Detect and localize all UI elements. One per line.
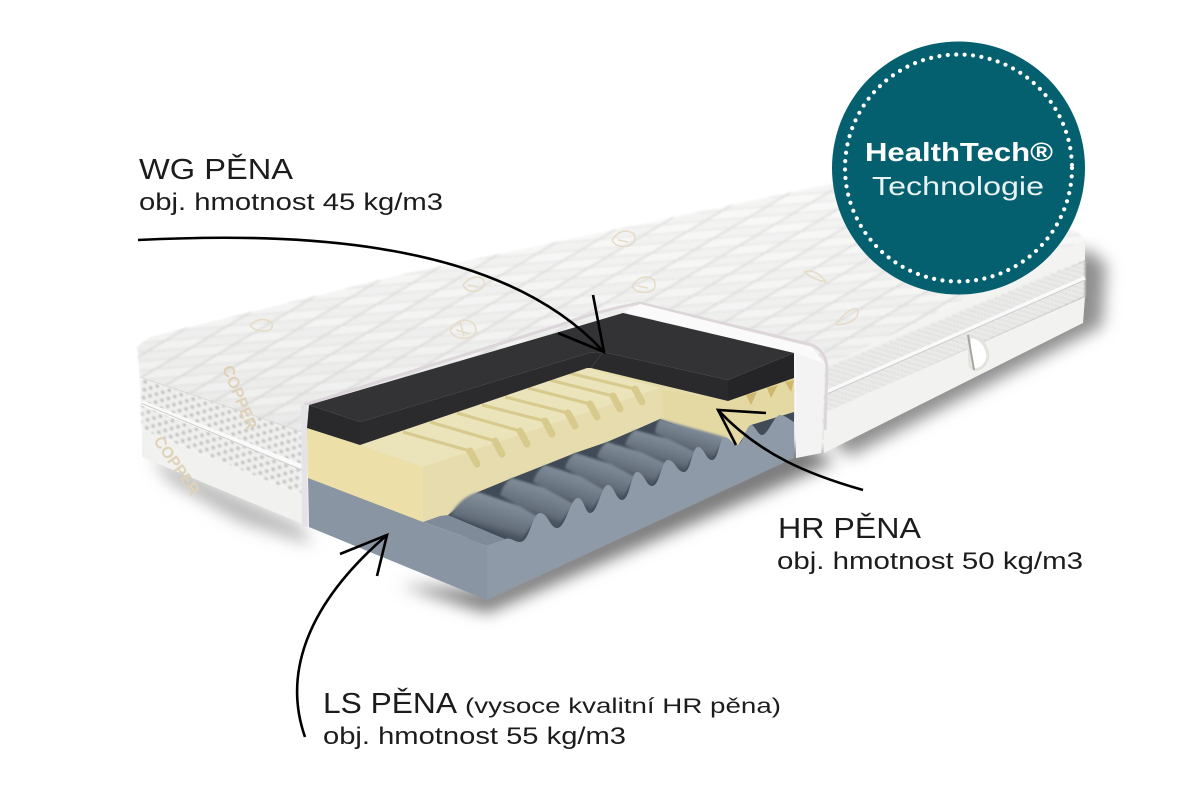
- corrugated recess: [448, 412, 794, 560]
- arrow: WG foam: [138, 238, 604, 352]
- arrow: HR foam: [718, 410, 863, 490]
- flat shoulder: [423, 515, 505, 545]
- side block face: [423, 388, 663, 524]
- mattress body: [137, 178, 1085, 525]
- brand print on fabric: [150, 363, 260, 499]
- quilted top surface: [137, 178, 1085, 440]
- front block face: [307, 428, 423, 522]
- label: HR foam: obj. hmotnost 50 kg/m3: [777, 548, 1083, 575]
- label: HR foam: HR PĚNA: [778, 512, 922, 545]
- left side panel: [140, 377, 305, 525]
- yellow foam base: [307, 366, 794, 524]
- badge: HealthTech Technologie: HealthTech®: [865, 137, 1053, 167]
- label: WG foam: WG PĚNA: [139, 153, 294, 186]
- cross-section surround: [304, 303, 827, 527]
- drop shadow under mattress: [150, 248, 1106, 613]
- badge: HealthTech Technologie: Technologie: [872, 171, 1044, 201]
- ridge flanks: [450, 419, 725, 542]
- label: HR foam: [777, 512, 1083, 575]
- label: WG foam: [139, 153, 443, 216]
- layer: WG foam (black): [307, 313, 794, 445]
- label: LS foam: LS PĚNA: [323, 687, 458, 720]
- brand print on fabric: COPPER: [150, 434, 203, 499]
- brand print on fabric: COPPER: [218, 363, 260, 433]
- layer: LS foam (grey): [308, 412, 794, 600]
- right long side panel: [824, 240, 1085, 453]
- badge: HealthTech Technologie: [832, 42, 1085, 294]
- left end face: [308, 478, 487, 600]
- transverse grooves: [403, 373, 642, 464]
- icon: side handle loop: [968, 335, 988, 370]
- label: WG foam: obj. hmotnost 45 kg/m3: [139, 189, 443, 216]
- right block section: [662, 378, 794, 447]
- arrow: LS foam: [297, 535, 387, 737]
- layer: HR foam (yellow): [307, 366, 794, 524]
- waved side face: [487, 415, 794, 600]
- label: LS foam: (vysoce kvalitní HR pěna): [465, 695, 781, 718]
- leaf ornaments on quilting: [250, 231, 858, 338]
- block top face: [360, 368, 660, 467]
- label: LS foam: [323, 687, 781, 750]
- label: LS foam: obj. hmotnost 55 kg/m3: [323, 723, 626, 750]
